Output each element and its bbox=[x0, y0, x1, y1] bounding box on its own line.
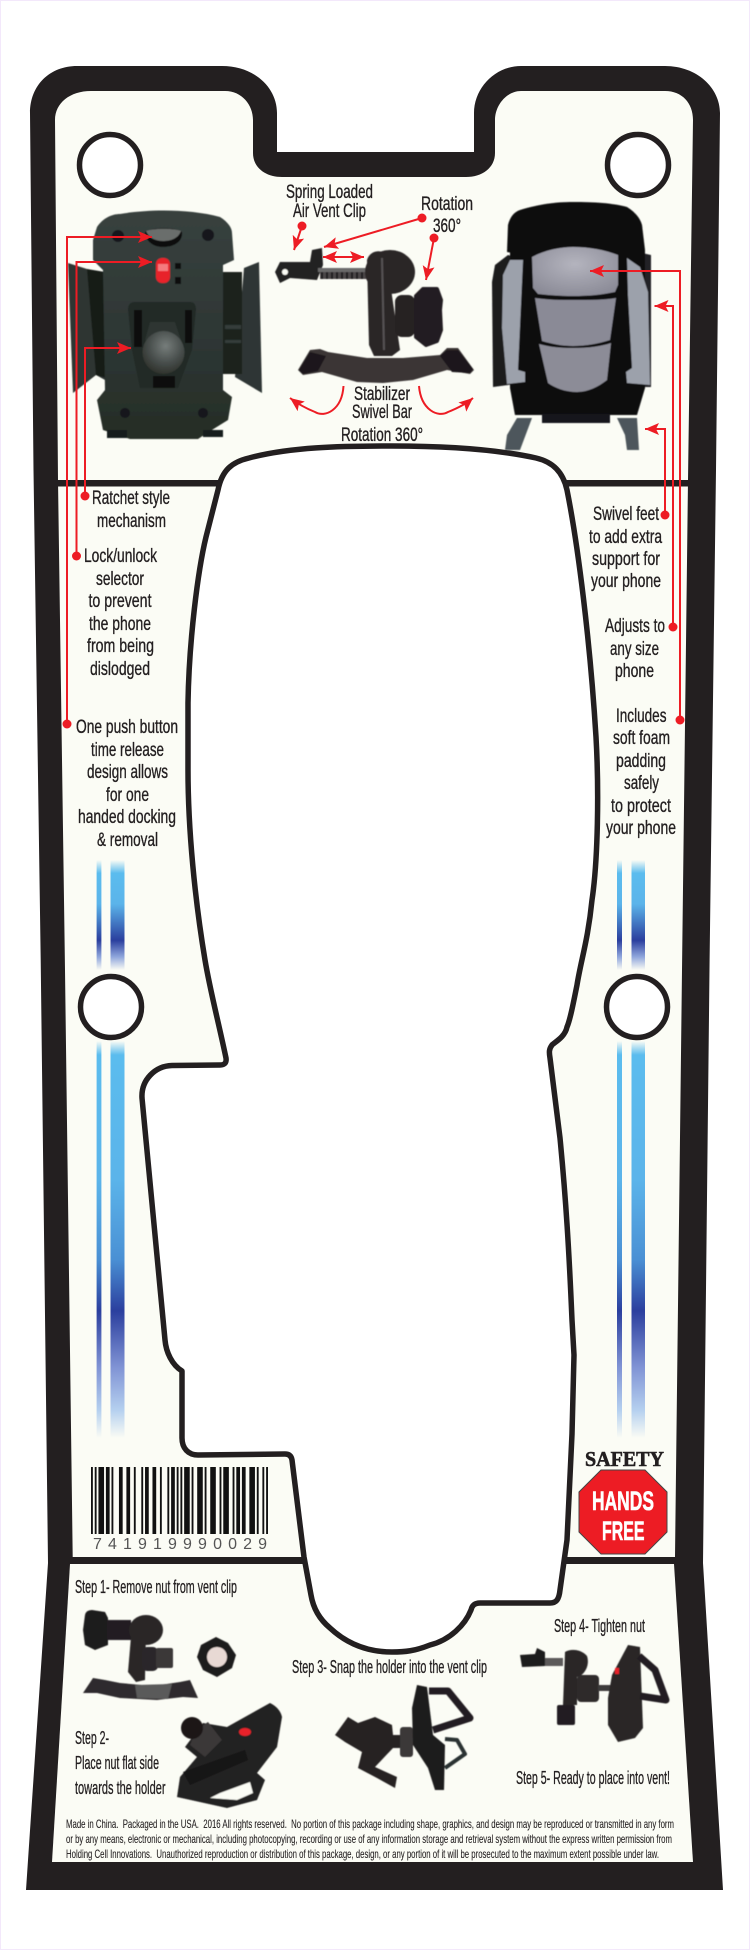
heading: spring loaded air vent clip: Air Vent Clip bbox=[293, 201, 366, 222]
leader: foam bbox=[590, 271, 684, 724]
text: foam: your phone bbox=[606, 818, 676, 839]
heading: spring loaded air vent clip: Spring Loaded bbox=[286, 182, 373, 203]
photo: step 4 tightened bbox=[520, 1645, 666, 1742]
safety hands free sign: SAFETY bbox=[585, 1447, 664, 1471]
photo: holder front view bbox=[492, 202, 651, 450]
heading: stabilizer swivel bar: Swivel Bar bbox=[352, 402, 412, 423]
arrow: swivel right bbox=[419, 386, 473, 414]
hang hole top left bbox=[80, 134, 140, 196]
text: one push button bbox=[76, 717, 178, 851]
legal fine print bbox=[66, 1817, 674, 1861]
text: swivel feet: Swivel feet bbox=[593, 504, 660, 525]
text: one push button: handed docking bbox=[78, 807, 176, 828]
barcode bbox=[91, 1467, 268, 1553]
leader: one push button bbox=[62, 237, 152, 728]
step 2 text: towards the holder bbox=[75, 1778, 166, 1798]
step 1 text: Step 1- Remove nut from vent clip bbox=[75, 1577, 237, 1597]
photo: step 2 holder bbox=[177, 1703, 282, 1808]
step 3 text: Step 3- Snap the holder into the vent clip bbox=[292, 1657, 487, 1677]
icon: hex nut bbox=[197, 1637, 236, 1677]
safety hands free sign bbox=[579, 1447, 667, 1554]
text: ratchet: Ratchet style bbox=[92, 488, 170, 509]
arrow: swivel left bbox=[290, 386, 344, 414]
photo: step 1 clip parts bbox=[83, 1610, 198, 1700]
step 2 text: Step 2- bbox=[75, 1728, 109, 1748]
blue stripes left bbox=[97, 860, 124, 1438]
phone cutout outline bbox=[142, 446, 598, 1652]
step 2 text: Place nut flat side bbox=[75, 1753, 159, 1773]
text: swivel feet: your phone bbox=[591, 571, 661, 592]
text: foam: Includes bbox=[616, 706, 666, 727]
step 4 text: Step 4- Tighten nut bbox=[554, 1616, 645, 1636]
text: adjusts: phone bbox=[615, 661, 654, 682]
safety hands free sign: HANDS bbox=[592, 1486, 654, 1516]
heading: rotation 360 bbox=[421, 194, 473, 237]
leader: lock selector bbox=[72, 262, 152, 560]
text: ratchet bbox=[92, 488, 170, 532]
hang hole top right bbox=[608, 134, 668, 196]
heading: spring loaded air vent clip bbox=[286, 182, 373, 222]
text: lock unlock: to prevent bbox=[88, 591, 152, 612]
text: foam: to protect bbox=[611, 796, 672, 817]
text: ratchet: mechanism bbox=[97, 511, 166, 532]
text: swivel feet bbox=[589, 504, 662, 592]
text: lock unlock: dislodged bbox=[90, 659, 150, 680]
text: foam: soft foam bbox=[613, 728, 670, 749]
leader: swivel feet bbox=[645, 429, 670, 520]
text: one push button: & removal bbox=[97, 830, 158, 851]
arrow: rotation to knob bbox=[426, 234, 438, 280]
text: one push button: time release bbox=[91, 740, 164, 761]
blue stripes right bbox=[617, 860, 645, 1438]
safety hands free sign: FREE bbox=[602, 1516, 644, 1546]
text: swivel feet: support for bbox=[592, 549, 661, 570]
heading: stabilizer swivel bar: Stabilizer bbox=[354, 384, 410, 405]
arrow: rotation to clip bbox=[324, 214, 426, 247]
photo: holder back view bbox=[68, 211, 262, 439]
text: one push button: One push button bbox=[76, 717, 178, 738]
text: foam: padding bbox=[616, 751, 666, 772]
leader: adjusts bbox=[654, 306, 678, 632]
text: lock unlock: selector bbox=[96, 569, 144, 590]
text: adjusts: Adjusts to bbox=[605, 616, 665, 637]
arrow: clip spring travel bbox=[323, 256, 364, 258]
leader: ratchet bbox=[80, 348, 131, 500]
step 2 text bbox=[75, 1728, 166, 1798]
heading: rotation 360: 360° bbox=[433, 216, 461, 237]
photo: air vent clip bbox=[275, 248, 474, 383]
arrow: air vent clip bbox=[294, 222, 306, 250]
heading: stabilizer swivel bar: Rotation 360° bbox=[341, 425, 423, 446]
hole middle right bbox=[606, 976, 668, 1038]
text: lock unlock: the phone bbox=[89, 614, 151, 635]
text: lock unlock: Lock/unlock bbox=[84, 546, 157, 567]
text: adjusts: any size bbox=[610, 639, 659, 660]
text: foam bbox=[606, 706, 676, 839]
text: adjusts bbox=[605, 616, 665, 682]
barcode: 741919990029 bbox=[93, 1536, 267, 1553]
heading: rotation 360: Rotation bbox=[421, 194, 473, 215]
photo: step 3 assembled bbox=[335, 1685, 470, 1790]
text: swivel feet: to add extra bbox=[589, 527, 662, 548]
text: foam: safely bbox=[624, 773, 659, 794]
text: one push button: for one bbox=[106, 785, 149, 806]
text: lock unlock: from being bbox=[87, 636, 154, 657]
text: lock unlock bbox=[84, 546, 157, 680]
heading: stabilizer swivel bar bbox=[341, 384, 423, 446]
hole middle left bbox=[80, 976, 142, 1038]
text: one push button: design allows bbox=[87, 762, 168, 783]
